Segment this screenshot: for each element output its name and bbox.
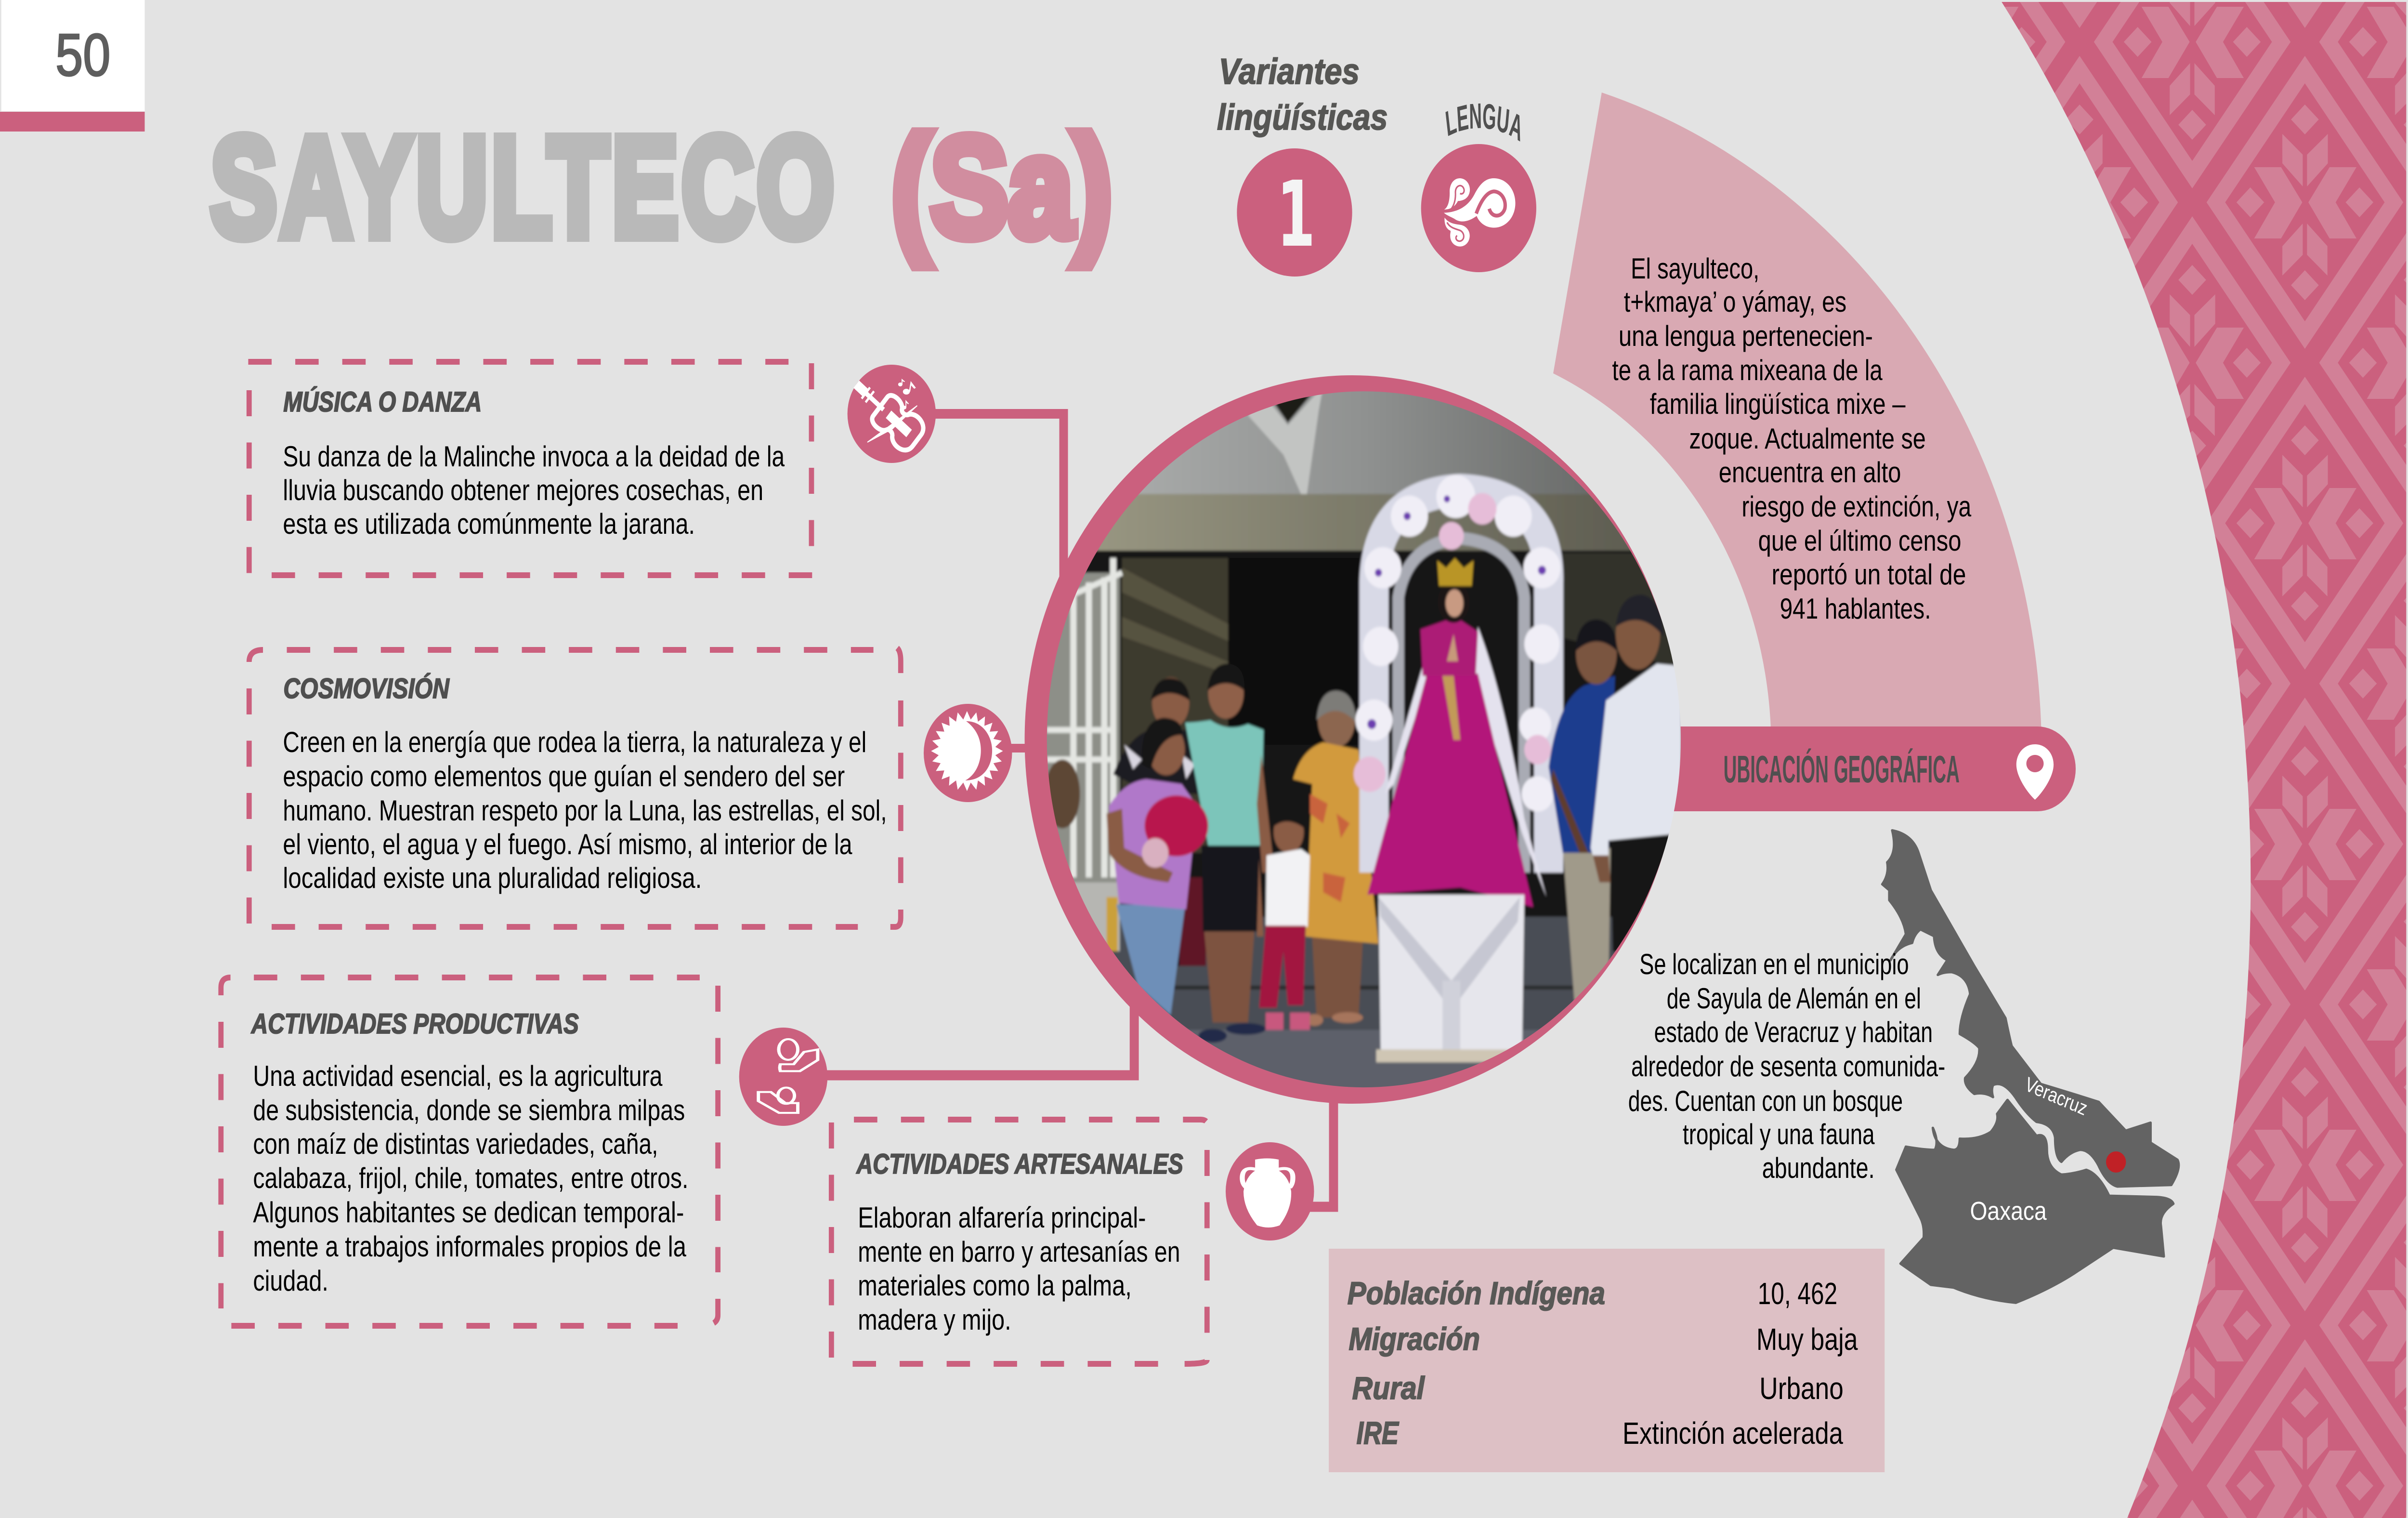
panel: language description sector: t+kmaya’ o yámay, es	[1624, 286, 1846, 318]
variantes lingüísticas badge: 1	[1277, 162, 1315, 267]
teal woman	[1204, 926, 1255, 1022]
text: location description: abundante.	[1762, 1152, 1875, 1185]
panel: language description sector: riesgo de extinción, ya	[1741, 490, 1971, 523]
icon: clay vase badge	[1226, 1142, 1314, 1241]
panel: language description sector: zoque. Actualmente se	[1689, 422, 1926, 455]
patterned side band	[2002, 2, 2406, 1518]
variantes lingüísticas badge: lingüísticas	[1217, 97, 1387, 138]
panel: música o danza	[248, 362, 814, 575]
panel: language description sector: encuentra en alto	[1719, 456, 1901, 489]
panel: statistics	[1329, 1249, 1885, 1472]
panel: cosmovisión: localidad existe una pluralidad religiosa.	[283, 862, 702, 895]
variantes lingüísticas badge: Variantes	[1219, 52, 1360, 92]
panel: statistics: Migración	[1348, 1321, 1480, 1357]
panel: música o danza: MÚSICA O DANZA	[283, 386, 482, 418]
panel: language description sector: 941 hablantes.	[1780, 593, 1931, 625]
panel: cosmovisión: COSMOVISIÓN	[283, 673, 450, 704]
photo: community with the statue	[1025, 375, 1681, 1104]
panel: actividades productivas: ciudad.	[253, 1265, 328, 1297]
gate	[1045, 573, 1120, 887]
panel: actividades artesanales: mente en barro y artesanías en	[858, 1236, 1180, 1268]
text: location description: estado de Veracruz y habitan	[1654, 1016, 1933, 1049]
map: Veracruz and Oaxaca: Oaxaca	[1970, 1197, 2047, 1226]
panel: actividades artesanales: ACTIVIDADES ARTESANALES	[856, 1148, 1183, 1180]
panel: language description sector: familia lingüística mixe –	[1650, 388, 1906, 421]
map: Veracruz and Oaxaca: Veracruz	[2022, 1073, 2090, 1120]
panel: language description sector: te a la rama mixeana de la	[1612, 354, 1883, 387]
panel: statistics: IRE	[1357, 1415, 1400, 1451]
text: location description: Se localizan en el municipio	[1639, 948, 1909, 981]
banner: ubicación geográfica	[1603, 726, 2076, 811]
panel: statistics: Población Indígena	[1348, 1276, 1605, 1311]
title: SAYULTECO	[210, 108, 838, 266]
panel: actividades productivas: de subsistencia, donde se siembra milpas	[253, 1094, 685, 1127]
panel: language description sector: que el último censo	[1758, 525, 1962, 557]
statue base	[1378, 895, 1524, 1050]
panel: statistics: Rural	[1352, 1371, 1425, 1406]
lengua badge: LENGUA	[1446, 103, 1520, 142]
statue arch	[1374, 490, 1549, 872]
banner: ubicación geográfica: UBICACIÓN GEOGRÁFICA	[1724, 748, 1960, 791]
panel: actividades artesanales: madera y mijo.	[858, 1304, 1011, 1336]
man in blue	[1563, 848, 1610, 1001]
page number tab	[0, 0, 144, 132]
title: (Sa)	[891, 108, 1112, 267]
girl with flowers	[1116, 905, 1185, 1015]
panel: cosmovisión: espacio como elementos que guían el sendero del ser	[283, 760, 845, 793]
panel: actividades artesanales: materiales como la palma,	[858, 1269, 1132, 1302]
panel: language description sector: reportó un total de	[1771, 558, 1966, 591]
panel: statistics: Muy baja	[1756, 1322, 1858, 1357]
panel: actividades productivas: ACTIVIDADES PRODUCTIVAS	[250, 1008, 579, 1040]
lengua badge	[1421, 103, 1536, 272]
panel: language description sector	[1553, 92, 2042, 737]
icon: violin badge	[846, 365, 936, 463]
marker: Sayula de Alemán	[2106, 1151, 2126, 1173]
panel: statistics: 10, 462	[1758, 1276, 1837, 1311]
panel: actividades productivas: Algunos habitantes se dedican temporal-	[253, 1196, 684, 1229]
man in white	[1610, 838, 1670, 956]
panel: actividades productivas: con maíz de distintas variedades, caña,	[253, 1128, 658, 1161]
map: Veracruz and Oaxaca	[1882, 831, 2179, 1303]
panel: actividades productivas: mente a trabajos informales propios de la	[253, 1230, 686, 1263]
page number tab: 50	[55, 22, 110, 88]
text: location description: de Sayula de Alemán en el	[1667, 982, 1921, 1015]
panel: language description sector: una lengua pertenecien-	[1619, 320, 1873, 353]
little girl	[1274, 812, 1304, 853]
panel: actividades artesanales: Elaboran alfarería principal-	[858, 1201, 1146, 1234]
text: location description	[1628, 948, 1945, 1185]
old woman	[1312, 937, 1363, 1017]
variantes lingüísticas badge	[1217, 52, 1387, 277]
connector lines	[823, 414, 1334, 1207]
panel: language description sector: El sayulteco,	[1631, 252, 1759, 285]
panel: cosmovisión	[249, 648, 901, 927]
panel: actividades productivas: calabaza, frijol, chile, tomates, entre otros.	[253, 1162, 688, 1195]
icon: sun and moon badge	[924, 704, 1012, 802]
icon: speech swirl	[1444, 178, 1515, 247]
panel: statistics: Urbano	[1759, 1371, 1844, 1406]
panel: cosmovisión: Creen en la energía que rodea la tierra, la naturaleza y el	[283, 726, 866, 759]
panel: statistics: Extinción acelerada	[1623, 1416, 1843, 1451]
panel: actividades productivas	[221, 977, 718, 1326]
panel: música o danza: Su danza de la Malinche invoca a la deidad de la	[283, 440, 785, 473]
panel: cosmovisión: el viento, el agua y el fuego. Así mismo, al interior de la	[283, 828, 852, 861]
woman at back left	[1152, 677, 1189, 728]
icon: hands and seed badge	[739, 1028, 827, 1126]
panel: música o danza: lluvia buscando obtener mejores cosechas, en	[283, 474, 763, 507]
icon: location pin	[2016, 744, 2054, 800]
panel: actividades productivas: Una actividad esencial, es la agricultura	[253, 1060, 663, 1093]
text: location description: tropical y una fauna	[1683, 1118, 1875, 1151]
statue cape and dress	[1385, 627, 1546, 897]
panel: cosmovisión: humano. Muestran respeto por la Luna, las estrellas, el sol,	[283, 794, 887, 827]
panel: música o danza: esta es utilizada comúnmente la jarana.	[283, 508, 695, 541]
text: location description: des. Cuentan con un bosque	[1628, 1085, 1903, 1118]
text: location description: alrededor de sesenta comunida-	[1631, 1050, 1945, 1083]
panel: actividades artesanales	[831, 1120, 1207, 1364]
